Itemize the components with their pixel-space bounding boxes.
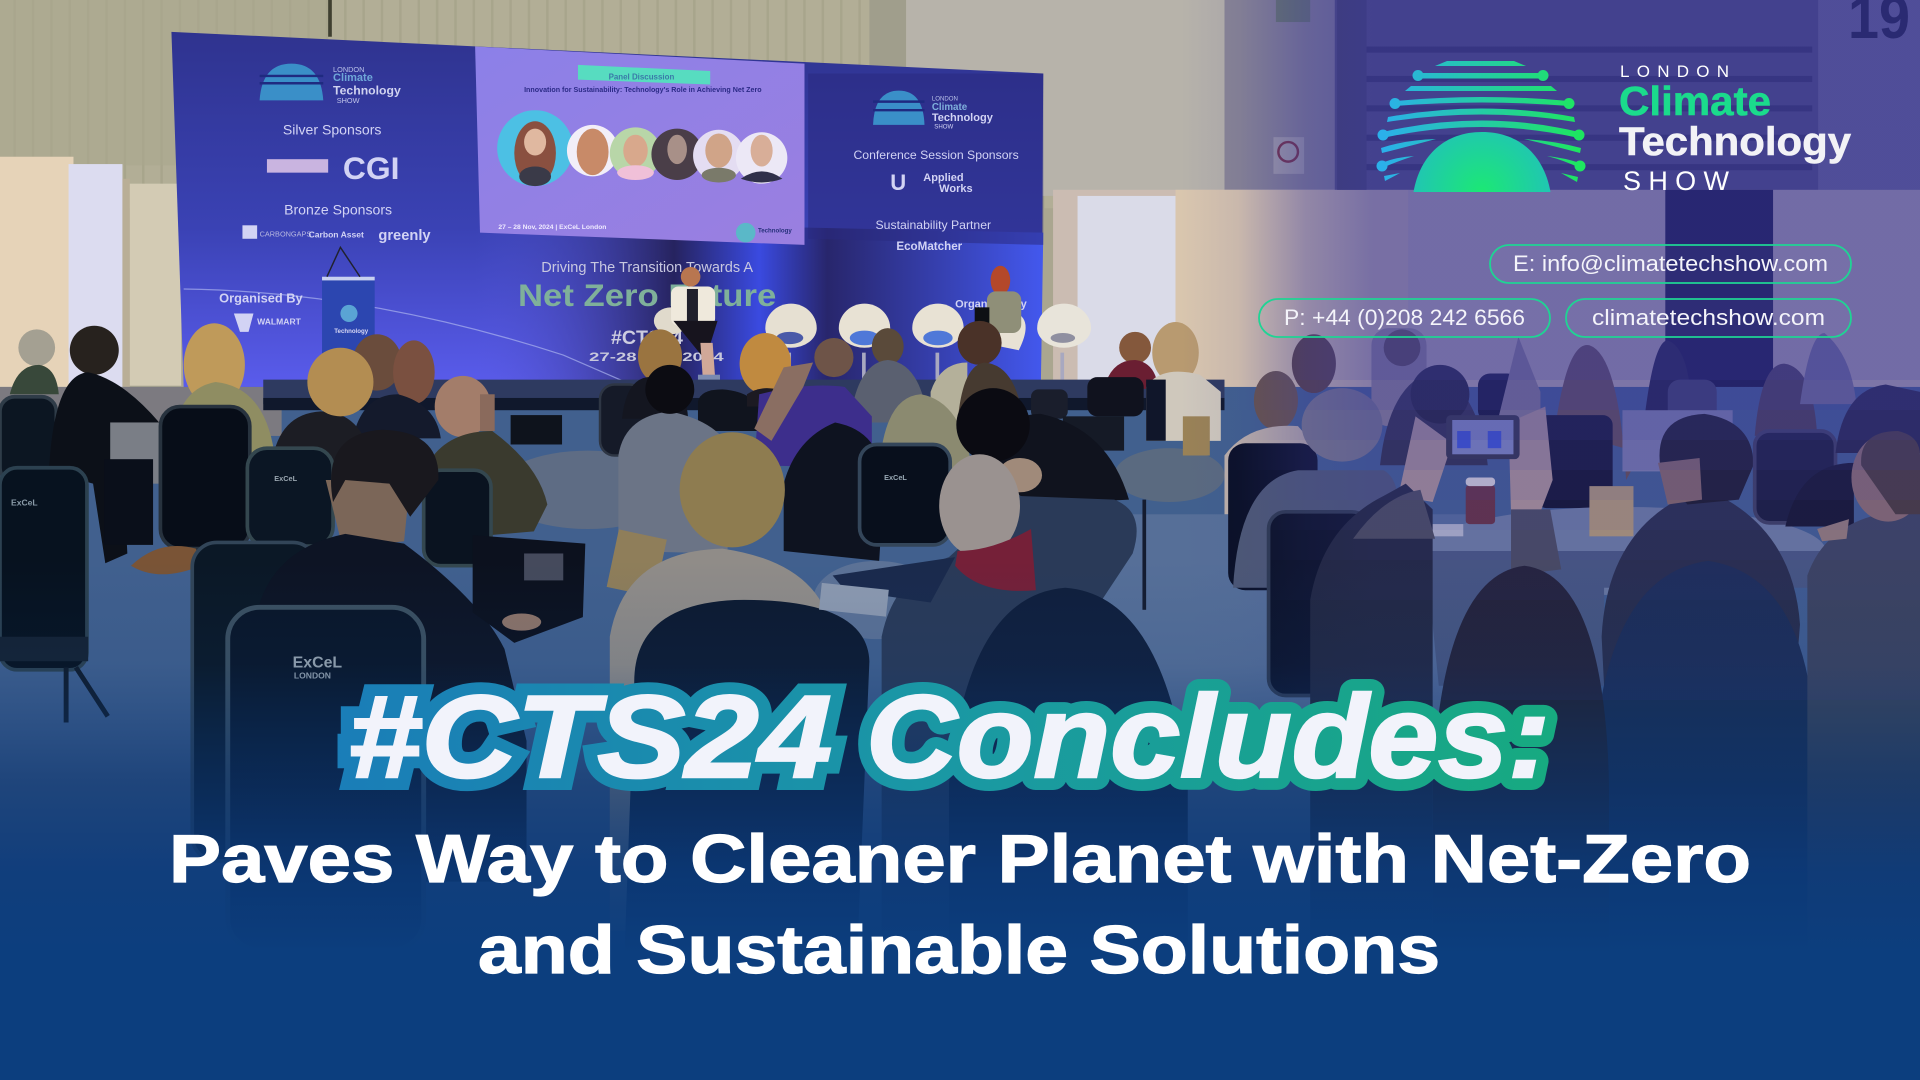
- backdrop headline: 27-28 Nov 2024: [589, 350, 724, 364]
- screen panel discussion: Panel Discussion: [609, 73, 674, 82]
- backdrop sponsors right: Sustainability Partner: [876, 218, 991, 232]
- backdrop sponsors right: U: [890, 170, 906, 195]
- logo icon: sun with signal bands: [1376, 61, 1586, 192]
- backdrop sponsors left: greenly: [378, 228, 431, 244]
- contact pill: email: [1490, 245, 1851, 283]
- screen panel discussion: Innovation for Sustainability: Technology's Role in Achieving Net Zero: [524, 85, 762, 94]
- contact pill: phone: [1259, 299, 1550, 337]
- colour overlay: navy fade bottom: [0, 560, 1920, 1080]
- contact pill: phone: P: +44 (0)208 242 6566: [1284, 305, 1525, 330]
- subtitle line 2: and Sustainable Solutions: [478, 912, 1440, 988]
- contact pill: email: E: info@climatetechshow.com: [1513, 251, 1828, 276]
- logo wordmark: [1619, 62, 1852, 196]
- stage chairs: [654, 304, 1091, 382]
- screen panel discussion: Technology: [758, 228, 792, 235]
- audience: right group: [1224, 328, 1920, 955]
- title: #CTS24 Concludes: Concludes:: [866, 671, 1550, 802]
- backdrop sponsors right: Organised By: [955, 298, 1028, 310]
- backdrop sponsors right: Climate: [932, 102, 968, 113]
- colour overlay: purple tint right: [0, 0, 1920, 700]
- title: #CTS24 Concludes: [348, 671, 1550, 802]
- title: #CTS24 Concludes: Concludes:: [866, 671, 1550, 802]
- podium: [322, 247, 375, 355]
- backdrop sponsors right: [853, 91, 1028, 310]
- backdrop logo left: Climate: [333, 72, 373, 84]
- backdrop sponsors right: Applied: [923, 172, 964, 184]
- backdrop logo left: Technology: [333, 83, 401, 97]
- backdrop logo left: LONDON: [333, 65, 364, 74]
- backdrop sponsors right: SHOW: [934, 124, 954, 131]
- backdrop sponsors right: EcoMatcher: [896, 240, 963, 253]
- backdrop sponsors left: Organised By: [219, 290, 304, 305]
- backdrop headline: Net Zero Future: [518, 277, 776, 313]
- audience: man with laptop: LONDON: [294, 670, 331, 680]
- backdrop sponsors left: Silver Sponsors: [283, 122, 381, 138]
- title: #CTS24 Concludes: #CTS24: [348, 671, 832, 802]
- subtitle line 1: Paves Way to Cleaner Planet with Net-Zero: [169, 821, 1751, 897]
- backdrop sponsors left: WALMART: [257, 316, 302, 326]
- floor and stage platform: [0, 380, 1920, 1078]
- logo wordmark: SHOW: [1623, 166, 1730, 196]
- audience: left seated group: ExCeL: [274, 474, 298, 483]
- backdrop sponsors left: Carbon Asset: [309, 230, 364, 240]
- podium: Technology: [334, 328, 369, 335]
- backdrop sponsors right: Conference Session Sponsors: [853, 148, 1019, 162]
- left booth panels: [0, 157, 181, 402]
- audience: stage-side rows: [10, 321, 1221, 468]
- screen panel discussion: [475, 47, 804, 245]
- backdrop logo left: [260, 64, 401, 105]
- logo wordmark: Climate: [1619, 78, 1771, 124]
- backdrop headline: [518, 260, 776, 364]
- audience: centre group: ExCeL: [884, 473, 907, 482]
- speaker: panellist with red hair: [975, 266, 1021, 333]
- contact pill: website: [1566, 299, 1851, 337]
- backdrop headline: #CTS24: [611, 327, 683, 349]
- audience: man with laptop: ExCeL: [11, 498, 38, 508]
- audience: left seated group: [0, 323, 547, 574]
- backdrop sponsors left: Bronze Sponsors: [284, 201, 392, 217]
- logo wordmark: Technology: [1619, 120, 1852, 164]
- backdrop sponsors right: Technology: [932, 112, 994, 124]
- audience: man with laptop: [0, 430, 585, 950]
- title: #CTS24 Concludes: #CTS24: [348, 671, 832, 802]
- backdrop sponsors right: Works: [939, 183, 973, 195]
- logo wordmark: LONDON: [1620, 62, 1729, 81]
- backdrop sponsors left: [219, 122, 431, 332]
- backdrop logo left: SHOW: [337, 96, 360, 105]
- logo: London Climate Technology Show: [1376, 61, 1852, 196]
- backdrop sponsors right: LONDON: [932, 95, 958, 102]
- backdrop headline: Driving The Transition Towards A: [541, 260, 753, 276]
- audience: centre group: [607, 365, 1188, 955]
- backdrop sponsors left: CARBONGAPS: [260, 229, 311, 238]
- audience: man with laptop: ExCeL: [293, 654, 342, 671]
- backdrop sponsors left: CGI: [343, 150, 399, 186]
- speaker: moderator in white jacket: [671, 267, 720, 382]
- screen panel discussion: 27 – 28 Nov, 2024 | ExCeL London: [498, 224, 606, 231]
- contact pill: website: climatetechshow.com: [1592, 305, 1825, 330]
